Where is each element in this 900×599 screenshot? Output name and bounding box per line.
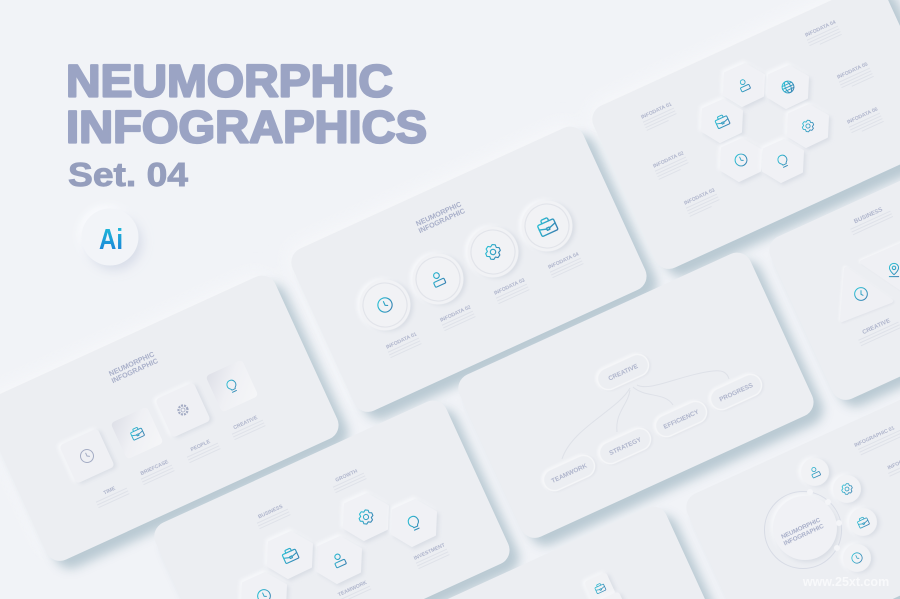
- panel: bottom edge card: [369, 502, 734, 599]
- icon tile: lower: [600, 591, 624, 599]
- text: infographic 01: INFOGRAPHIC 01: [854, 425, 896, 449]
- circle: gear: [459, 218, 527, 286]
- pill: creative: [594, 351, 652, 393]
- text: infodata 04: [804, 19, 842, 49]
- text: investment: INVESTMENT: [413, 542, 447, 562]
- panel: hexagon timeline card: [149, 396, 514, 599]
- panel: square icons card: [0, 271, 343, 566]
- tile: briefcase (pressed): [110, 406, 164, 460]
- text: people: PEOPLE: [190, 439, 212, 453]
- text: creative: CREATIVE: [862, 318, 891, 336]
- text: infodata 01: INFODATA 01: [640, 101, 673, 121]
- radial title: NEUMORPHIC: [780, 517, 822, 541]
- icon tile: briefcase: [584, 572, 616, 599]
- text: infodata 03: INFODATA 03: [493, 277, 526, 297]
- hexagon: bulb: [763, 140, 803, 182]
- pill: progress: [707, 371, 765, 413]
- hexagon: globe: [768, 66, 808, 108]
- text: briefcase: [138, 458, 175, 485]
- hexagon: user: [724, 64, 764, 106]
- text: infodata 03: [493, 277, 530, 304]
- text: infodata 05: INFODATA 05: [836, 61, 869, 81]
- panel: hexagon ring card: [587, 0, 900, 274]
- text: briefcase: BRIEFCASE: [140, 459, 170, 477]
- tile: gear: [155, 382, 211, 438]
- radial ring and centre disc: [764, 489, 842, 568]
- hexagon: briefcase: [268, 532, 312, 578]
- main heading: [66, 56, 427, 152]
- text: teamwork: TEAMWORK: [337, 580, 368, 598]
- card title: NEUMORPHIC: [414, 200, 463, 228]
- tile: clock: [59, 428, 115, 484]
- text: infodata 05: [836, 61, 874, 91]
- flowchart connectors: [562, 371, 729, 459]
- text: infodata 01: INFODATA 01: [385, 331, 418, 351]
- hexagon: bulb: [392, 500, 436, 546]
- text: infodata 02: [652, 150, 690, 180]
- triangle: location: [862, 244, 900, 290]
- text: infodata 06: [846, 106, 884, 136]
- triangle: clock: [842, 269, 891, 320]
- text: creative: [229, 413, 266, 440]
- text: infodata 02: INFODATA 02: [652, 150, 685, 170]
- text: time: [93, 481, 130, 508]
- main heading: NEUMORPHIC: [66, 56, 393, 106]
- text: infodata 01: [385, 331, 422, 358]
- text: business: BUSINESS: [853, 207, 884, 225]
- radial title: INFOGRAPHIC: [783, 523, 826, 547]
- node: user: [796, 453, 834, 491]
- pill: strategy: STRATEGY: [608, 436, 643, 457]
- circle: user: [404, 245, 472, 313]
- pill: teamwork: [540, 452, 598, 494]
- hexagon: clock: [242, 573, 286, 599]
- panel: radial circle card: [681, 367, 900, 599]
- main heading: INFOGRAPHICS: [66, 102, 427, 152]
- text: business: [847, 204, 893, 235]
- text: infodata 04: [547, 251, 584, 278]
- panel: triangles card: [764, 110, 900, 405]
- text: infodata 03: INFODATA 03: [683, 187, 716, 207]
- card title: NEUMORPHIC: [107, 350, 156, 378]
- badge: Ai: [82, 208, 138, 266]
- text: business: BUSINESS: [257, 504, 284, 520]
- node: clock: [838, 539, 876, 577]
- text: people: [184, 436, 221, 463]
- panel: circle steps card: [286, 122, 651, 417]
- card title: INFOGRAPHIC: [417, 206, 466, 235]
- tile: bulb (pressed): [205, 359, 259, 413]
- node: briefcase: [844, 503, 882, 541]
- text: infodata 04: INFODATA 04: [804, 19, 837, 39]
- text: infodata 02: [439, 304, 476, 331]
- text: infodata 06: INFODATA 06: [846, 106, 879, 126]
- pill: strategy: [596, 425, 654, 467]
- card title: INFOGRAPHIC: [110, 356, 159, 385]
- text: infographic 01: [854, 422, 900, 456]
- pill: progress: PROGRESS: [718, 382, 755, 403]
- text: infodata 02: INFODATA 02: [439, 304, 472, 324]
- text: infodata 04: INFODATA 04: [547, 251, 580, 271]
- pill: teamwork: TEAMWORK: [550, 462, 589, 485]
- text: growth: GROWTH: [335, 468, 359, 484]
- text: business: [254, 502, 291, 529]
- text: investment: [413, 542, 450, 569]
- pill: efficiency: [652, 398, 710, 440]
- text: creative: CREATIVE: [233, 415, 259, 431]
- badge: Ai: Ai: [99, 224, 123, 256]
- node: gear: [828, 470, 866, 508]
- text: growth: [330, 466, 367, 493]
- text: infographic 02: [885, 446, 900, 477]
- pill: efficiency: EFFICIENCY: [663, 408, 701, 431]
- text: infodata 03: [683, 187, 721, 217]
- text: time: TIME: [103, 486, 117, 496]
- subheading: Set. 04: [68, 156, 189, 193]
- text: infodata 01: [640, 101, 678, 131]
- watermark: www.25xt.com: [802, 575, 889, 589]
- text: creative: [855, 315, 900, 346]
- hexagon: gear: [788, 105, 828, 147]
- pill: creative: CREATIVE: [607, 363, 640, 383]
- hexagon: gear: [344, 494, 388, 540]
- circle: briefcase: [513, 192, 581, 260]
- hexagon: clock: [721, 139, 761, 181]
- hexagon: briefcase: [702, 100, 742, 142]
- panel: flowchart card: [453, 248, 818, 543]
- hexagon: user: [317, 537, 361, 583]
- circle: clock: [351, 271, 419, 339]
